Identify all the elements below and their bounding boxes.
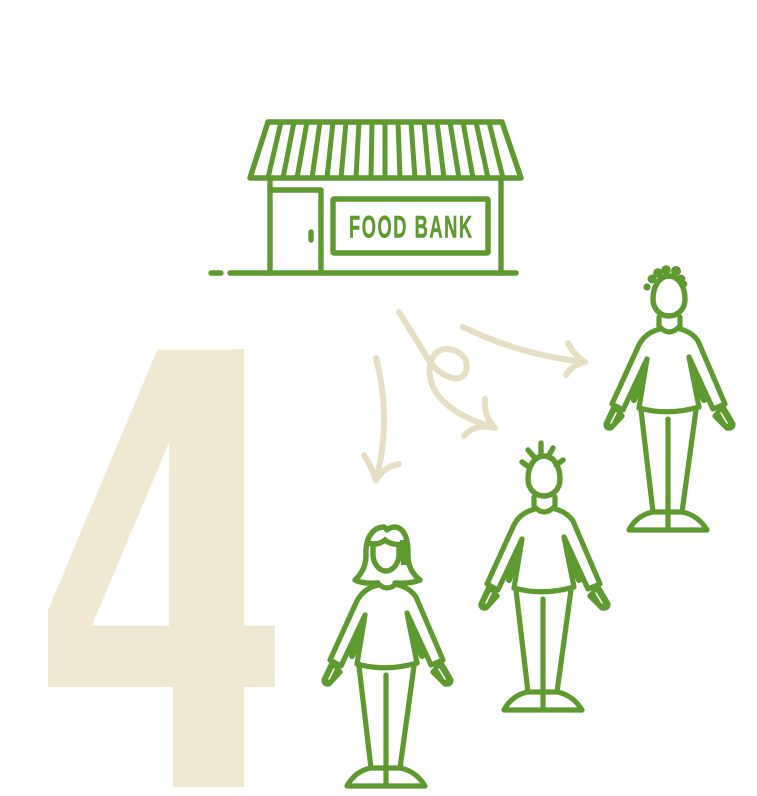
hair <box>355 527 420 583</box>
awning <box>250 122 521 178</box>
person: right with curly hair <box>606 265 733 530</box>
door <box>270 190 321 273</box>
person: middle with spiky hair <box>481 443 608 710</box>
ground line <box>211 270 516 276</box>
spiky hair <box>522 443 563 467</box>
arrow: to left person <box>364 358 399 480</box>
sign <box>333 199 488 253</box>
arrow: looped to middle person <box>399 312 495 436</box>
person: left with long hair <box>324 527 451 786</box>
sign text: FOOD BANK <box>349 211 474 245</box>
thick hair side <box>403 540 404 565</box>
head <box>528 456 560 496</box>
icon: food bank store <box>211 122 521 273</box>
store walls <box>270 178 501 273</box>
fringe <box>368 540 406 544</box>
curly hair <box>643 265 687 291</box>
arrow: to right person <box>463 327 585 375</box>
face <box>373 544 399 571</box>
head <box>653 276 685 316</box>
